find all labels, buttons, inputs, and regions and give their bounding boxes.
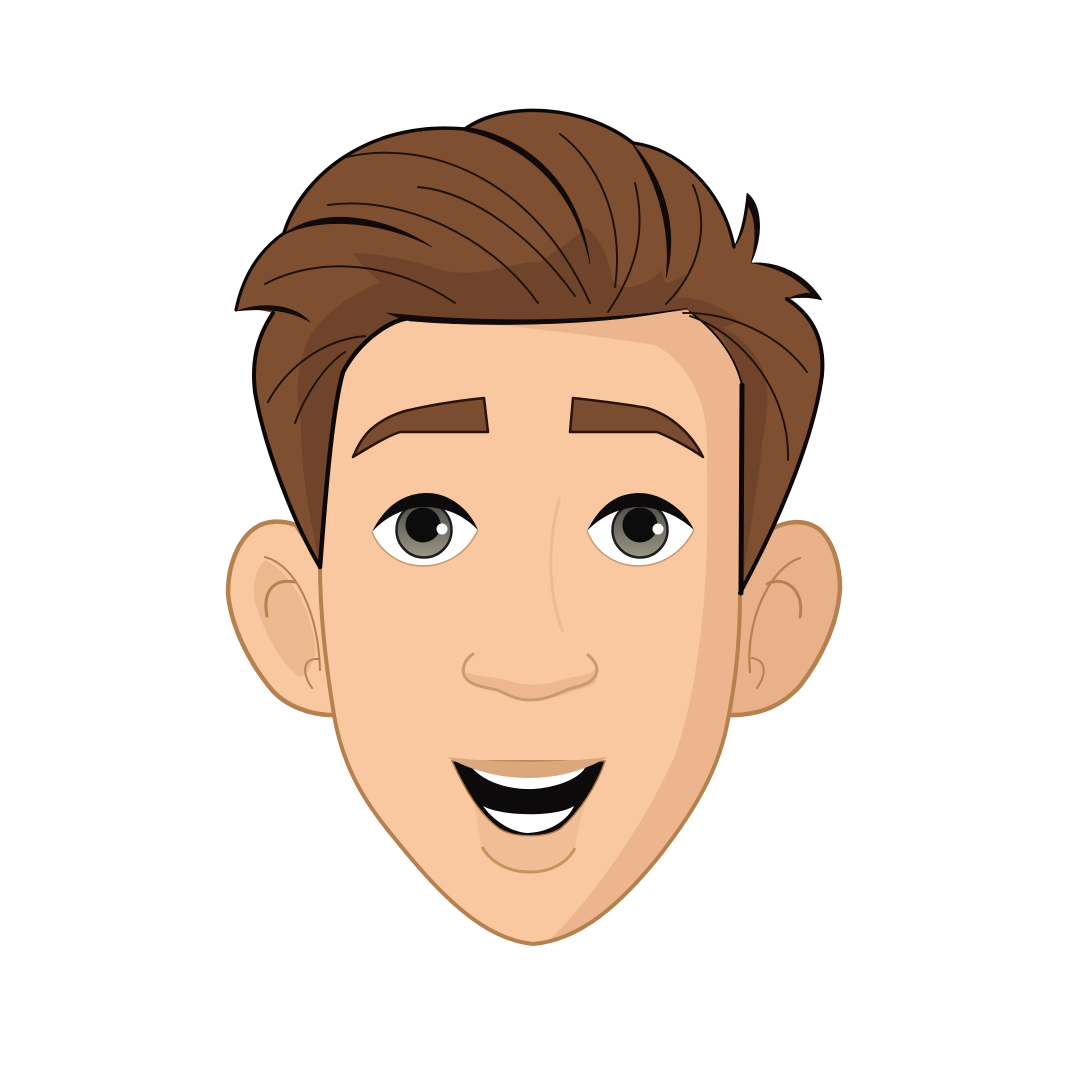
icon: open mouth	[447, 757, 608, 872]
icon: right eyebrow	[570, 398, 703, 457]
icon: left ear	[228, 522, 336, 715]
upper teeth	[472, 768, 585, 789]
hair: main silhouette	[236, 110, 822, 593]
lower teeth	[483, 806, 574, 833]
icon: nose bridge	[551, 497, 563, 632]
icon: nose	[463, 654, 597, 700]
jaw outline	[320, 567, 740, 944]
icon: left eyebrow	[353, 398, 488, 457]
hair: thick tapered strands	[236, 127, 822, 325]
mouth cavity	[452, 761, 605, 836]
face	[320, 310, 741, 944]
icon: right eye	[587, 493, 694, 566]
icon: right ear	[728, 522, 840, 715]
chin shading under the lip	[473, 790, 590, 872]
hair: thin strands	[265, 134, 807, 460]
illustration: cartoon head of a smiling man	[226, 108, 842, 946]
icon: left eye	[372, 493, 478, 566]
hair: outline strokes	[236, 110, 822, 593]
face shading	[440, 310, 741, 943]
upper lip	[447, 757, 608, 778]
hair: dark shading	[298, 227, 767, 577]
